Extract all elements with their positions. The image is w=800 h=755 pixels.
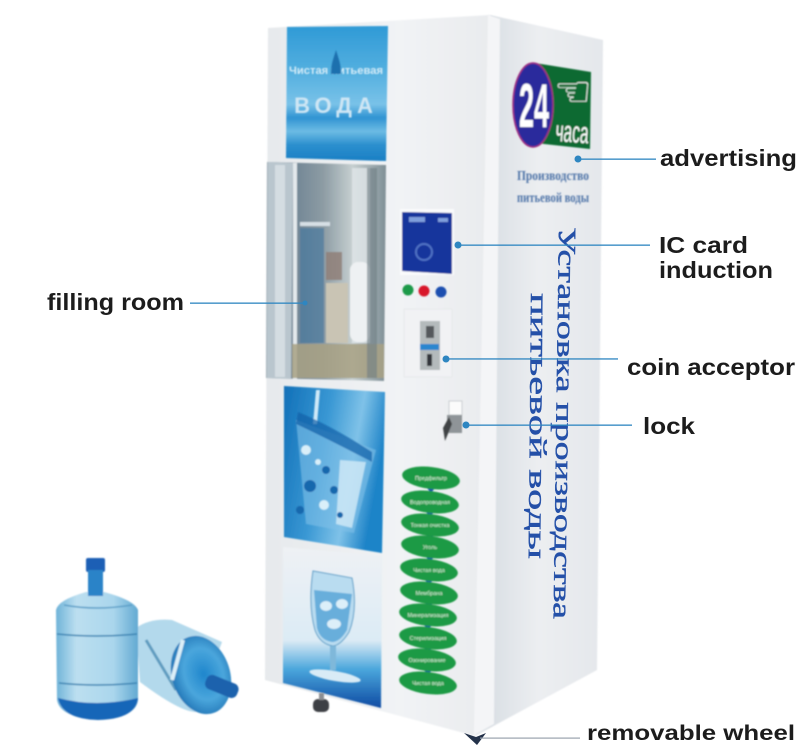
leader: lock [462, 422, 632, 428]
step 4: Уголь [423, 545, 437, 551]
step 2 [400, 488, 460, 516]
step 1: Предфильтр [415, 476, 447, 482]
side small text: питьевой воды [517, 191, 589, 206]
icon: lock [443, 401, 462, 441]
step 7 [398, 601, 458, 629]
side heading: питьевой воды [523, 293, 552, 560]
metal door frame [267, 162, 293, 379]
step 10: Чистая вода [412, 681, 445, 687]
side small text: Производство [517, 169, 589, 184]
label: IC card induction: IC card [659, 232, 748, 258]
side heading [523, 227, 580, 619]
panel: water pouring poster [284, 386, 385, 553]
step 9 [397, 646, 457, 674]
vending machine [265, 15, 603, 736]
step 9: Озонирование [408, 658, 446, 664]
step 6 [399, 579, 459, 607]
panel: IC card screen [400, 209, 454, 275]
icon: front wheel [313, 693, 329, 712]
step connectors [424, 488, 435, 675]
step 7: Минерализация [408, 613, 448, 619]
label: coin acceptor: coin acceptor [627, 354, 795, 380]
step 3: Тонкая очистка [411, 523, 450, 529]
blue circle [513, 63, 553, 147]
side small text [517, 169, 589, 206]
step 6: Мембрана [416, 591, 443, 597]
badge: 24 hours [513, 63, 592, 150]
process steps [397, 464, 461, 697]
machine side panel [475, 15, 603, 736]
filling room interior [326, 283, 348, 343]
lying bottle [136, 620, 241, 722]
leader: removable wheel [464, 733, 580, 745]
panel: filling room [266, 162, 386, 381]
label: IC card induction [659, 232, 773, 283]
leader: IC card [454, 242, 650, 248]
label: lock: lock [643, 413, 695, 439]
leader: filling room [190, 300, 308, 306]
machine front panel [265, 15, 490, 736]
step 8 [398, 624, 458, 652]
step 3 [400, 511, 460, 539]
label: filling room: filling room [47, 289, 184, 315]
leader: advertising [574, 156, 656, 162]
step 5: Чистая вода [413, 568, 446, 574]
label: advertising: advertising [660, 145, 797, 171]
indicator buttons [402, 284, 446, 298]
step 1 [401, 464, 461, 492]
label: IC card induction: induction [659, 257, 773, 283]
water bottles [56, 558, 241, 722]
glass of water [296, 390, 376, 533]
step 2: Водопроводная [410, 500, 450, 506]
panel: wine glass poster [283, 547, 382, 708]
icon: pointing hand: ☜ [554, 67, 592, 116]
step 8: Стерилизация [410, 636, 446, 642]
wine glass [309, 571, 361, 685]
green sign [535, 63, 591, 149]
poster heading: ВОДА [294, 93, 378, 118]
panel: top water poster [286, 26, 388, 161]
water drop [331, 50, 341, 74]
badge: 24 hours: 24 [519, 72, 549, 141]
poster caption: Чистая питьевая [289, 65, 383, 77]
step 10 [398, 669, 458, 697]
badge word: часа [555, 115, 590, 150]
leader: coin acceptor [442, 356, 618, 362]
standing bottle [56, 558, 138, 720]
step 5 [399, 556, 459, 584]
step 4 [400, 533, 460, 561]
side heading: Установка производства [548, 227, 580, 619]
panel: coin acceptor [404, 309, 452, 377]
label: removable wheel: removable wheel [587, 722, 795, 745]
corner edge strip [474, 15, 500, 735]
